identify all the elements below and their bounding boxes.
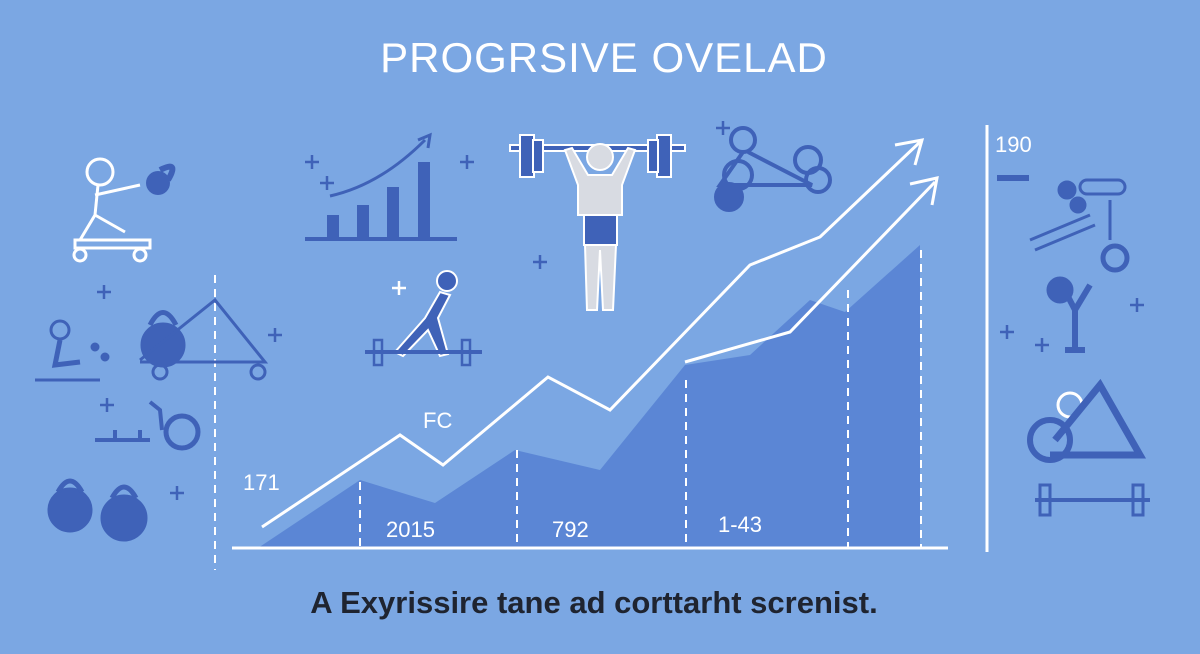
axis bbox=[232, 546, 948, 550]
icon: left cluster bbox=[35, 300, 265, 541]
icon: overhead lifter bbox=[510, 135, 685, 310]
labels: 2015 bbox=[386, 517, 435, 542]
labels: 171 bbox=[243, 470, 280, 495]
plus signs bbox=[97, 121, 1144, 500]
labels: 190 bbox=[995, 132, 1032, 157]
trend arrow 1 bbox=[262, 140, 922, 527]
title: PROGRSIVE OVELAD bbox=[380, 34, 828, 81]
icon: kettlebell triangle bbox=[716, 128, 830, 210]
icon: deadlift bbox=[365, 271, 482, 365]
right vertical line bbox=[986, 125, 988, 552]
icon: sitting on cart bbox=[74, 159, 172, 261]
labels bbox=[243, 132, 1032, 542]
icon: bar chart bbox=[305, 135, 457, 241]
labels: 792 bbox=[552, 517, 589, 542]
labels: FC bbox=[423, 408, 452, 433]
trend arrow 2 bbox=[685, 178, 937, 362]
labels: 1-43 bbox=[718, 512, 762, 537]
area fill bbox=[258, 245, 920, 548]
subtitle: A Exyrissire tane ad corttarht screnist. bbox=[310, 585, 878, 620]
chart: progressive overload bbox=[215, 132, 1032, 570]
icon: right cluster bbox=[1030, 180, 1150, 515]
